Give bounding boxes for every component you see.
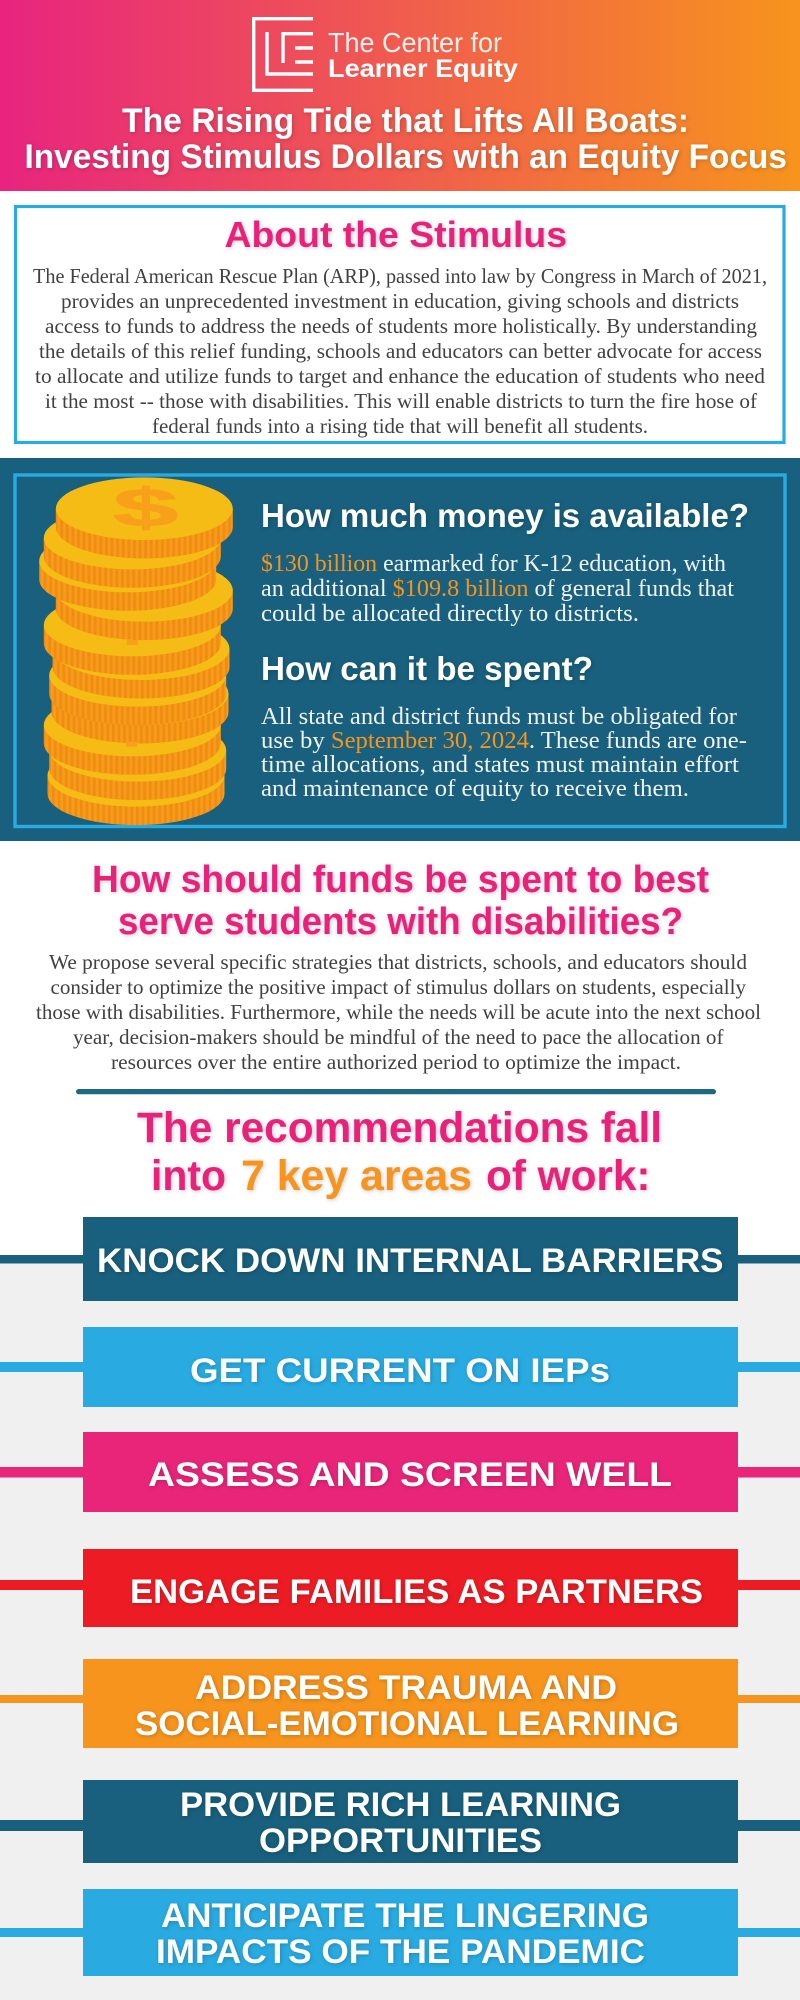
about body text: provides an unprecedented investment in education, giving schools and districts bbox=[61, 289, 739, 313]
strategies body text: resources over the entire authorized period to optimize the impact. bbox=[111, 1050, 681, 1074]
heading: seven key areas: The recommendations fall bbox=[137, 1104, 662, 1152]
logo wordmark bbox=[328, 27, 518, 83]
key area 7: anticipate the lingering impacts: IMPACTS OF THE PANDEMIC bbox=[156, 1933, 645, 1971]
panel: about the stimulus bbox=[16, 206, 784, 442]
about body text: federal funds into a rising tide that will benefit all students. bbox=[152, 414, 648, 438]
strategies body text: We propose several specific strategies that districts, schools, and educators should bbox=[49, 950, 747, 974]
spending rules text: and maintenance of equity to receive them. bbox=[261, 776, 689, 802]
funding amounts text: could be allocated directly to districts. bbox=[261, 601, 639, 627]
about body text: it the most -- those with disabilities. This will enable districts to turn the fire hose of bbox=[45, 389, 757, 413]
key area 2: get current on IEPs: GET CURRENT ON IEPs bbox=[190, 1352, 610, 1390]
heading: seven key areas bbox=[137, 1104, 662, 1200]
key area 4: engage families as partners bbox=[0, 1549, 800, 1627]
logo wordmark: Learner Equity bbox=[328, 55, 518, 83]
key area 6: provide rich learning opportunities bbox=[0, 1780, 800, 1863]
spending rules text bbox=[261, 704, 747, 802]
strategies body text: consider to optimize the positive impact of stimulus dollars on students, especially bbox=[50, 975, 746, 999]
spending rules text: All state and district funds must be obligated for bbox=[261, 704, 737, 730]
funding amounts text bbox=[261, 551, 734, 627]
key area 7: anticipate the lingering impacts bbox=[0, 1889, 800, 1976]
strategies body text: year, decision-makers should be mindful of the need to pace the allocation of bbox=[73, 1025, 724, 1049]
heading: seven key areas: into bbox=[151, 1152, 226, 1200]
key area 5: address trauma and social-emotional learning: ADDRESS TRAUMA AND bbox=[195, 1669, 617, 1707]
panel: funding details bbox=[0, 458, 800, 841]
spending rules text: time allocations, and states must maintain effort bbox=[261, 752, 739, 778]
key area 6: provide rich learning opportunities: PROVIDE RICH LEARNING bbox=[180, 1786, 621, 1824]
about body text: the details of this relief funding, schools and educators can better advocate for access bbox=[39, 339, 762, 363]
key area 2: get current on IEPs bbox=[0, 1327, 800, 1407]
key area 1: knock down internal barriers: KNOCK DOWN INTERNAL BARRIERS bbox=[97, 1242, 724, 1280]
funding amounts text: an additional $109.8 billion of general funds that bbox=[261, 576, 734, 602]
key area 5: address trauma and social-emotional learning: SOCIAL-EMOTIONAL LEARNING bbox=[135, 1705, 679, 1743]
spending rules text: use by September 30, 2024. These funds are one- bbox=[261, 728, 747, 754]
key area 3: assess and screen well bbox=[0, 1432, 800, 1512]
strategies body text: those with disabilities. Furthermore, while the needs will be acute into the next school bbox=[36, 1000, 761, 1024]
heading: how should funds be spent: serve students with disabilities? bbox=[118, 901, 683, 943]
heading: how should funds be spent: How should funds be spent to best bbox=[92, 859, 709, 901]
icon: stack of gold coins bbox=[39, 477, 233, 825]
key area 5: address trauma and social-emotional learning bbox=[0, 1659, 800, 1748]
heading: about the stimulus: About the Stimulus bbox=[224, 214, 567, 255]
logo wordmark: The Center for bbox=[328, 27, 502, 58]
title: Investing Stimulus Dollars with an Equity Focus bbox=[24, 138, 787, 176]
key area 4: engage families as partners: ENGAGE FAMILIES AS PARTNERS bbox=[130, 1573, 703, 1611]
key area 6: provide rich learning opportunities: OPPORTUNITIES bbox=[259, 1822, 542, 1860]
key area 1: knock down internal barriers bbox=[0, 1217, 800, 1301]
title: The Rising Tide that Lifts All Boats: bbox=[122, 102, 689, 140]
header banner bbox=[0, 0, 800, 191]
about body text: access to funds to address the needs of students more holistically. By understanding bbox=[45, 314, 758, 338]
heading: seven key areas: of work: bbox=[486, 1152, 650, 1200]
about body text bbox=[33, 264, 767, 438]
heading: how can it be spent: How can it be spent? bbox=[261, 650, 593, 687]
heading: how much money is available: How much money is available? bbox=[261, 497, 749, 534]
key area 7: anticipate the lingering impacts: ANTICIPATE THE LINGERING bbox=[161, 1897, 649, 1935]
icon: Center for Learner Equity logo mark bbox=[254, 19, 313, 90]
about body text: to allocate and utilize funds to target and enhance the education of students who need bbox=[35, 364, 766, 388]
heading: seven key areas: 7 key areas bbox=[241, 1152, 472, 1200]
funding amounts text: $130 billion earmarked for K-12 education, with bbox=[261, 551, 726, 577]
strategies body text bbox=[36, 950, 761, 1074]
icon: stack of gold coins: $ bbox=[113, 478, 178, 538]
heading: how should funds be spent bbox=[92, 859, 709, 943]
about body text: The Federal American Rescue Plan (ARP), passed into law by Congress in March of 2021, bbox=[33, 264, 767, 288]
key area 3: assess and screen well: ASSESS AND SCREEN WELL bbox=[148, 1456, 672, 1494]
title bbox=[24, 102, 787, 176]
